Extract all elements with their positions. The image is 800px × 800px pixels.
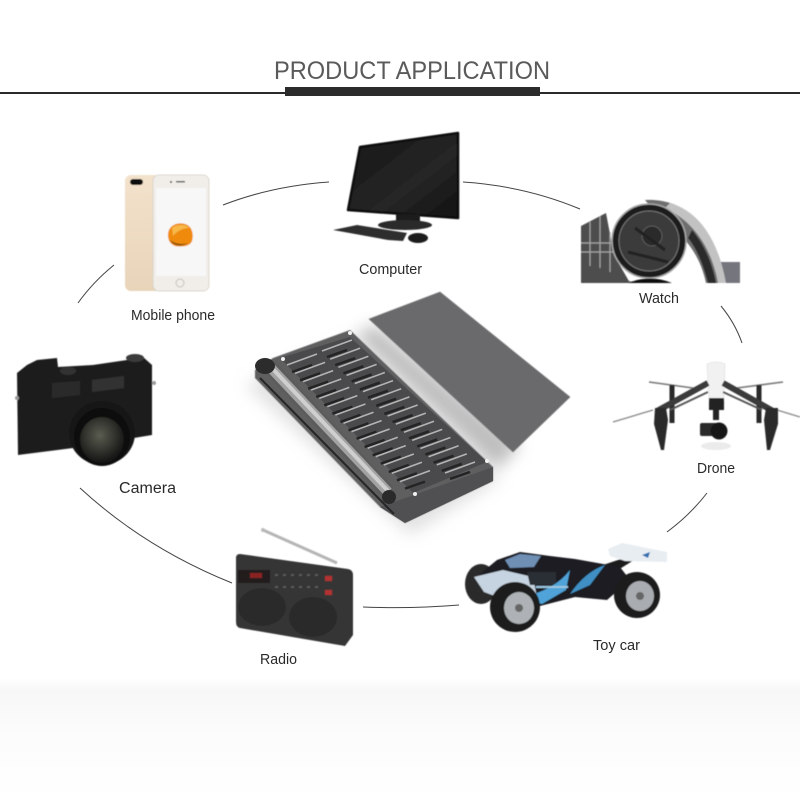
driver bits (287, 340, 475, 482)
icon: drone (613, 362, 800, 450)
label: watch: Watch (639, 291, 679, 307)
title: PRODUCT APPLICATION (274, 57, 550, 85)
label: camera: Camera (119, 480, 176, 497)
screws (281, 331, 489, 496)
gap shadow between case and lid (355, 325, 520, 470)
label: mobile phone: Mobile phone (131, 308, 215, 324)
driver bits shadows (292, 350, 470, 489)
icon: mobile phone (125, 175, 209, 291)
case shadow (245, 340, 500, 535)
icon: radio (236, 528, 353, 646)
label: radio: Radio (260, 652, 297, 668)
icon: watch (581, 200, 740, 283)
central product: screwdriver bit case (245, 292, 570, 535)
bottom grey fade band (0, 678, 800, 800)
tray recess (280, 337, 487, 493)
label: drone: Drone (697, 461, 735, 477)
label: computer: Computer (359, 262, 422, 278)
label: toy car: Toy car (593, 638, 640, 654)
icon: computer (333, 133, 458, 243)
icon: toy car (465, 543, 667, 632)
tray body (255, 330, 493, 523)
case lid (369, 292, 570, 452)
title underline (0, 87, 800, 96)
connector arcs ring (78, 182, 742, 608)
icon: camera (15, 354, 156, 466)
roller (255, 358, 396, 514)
